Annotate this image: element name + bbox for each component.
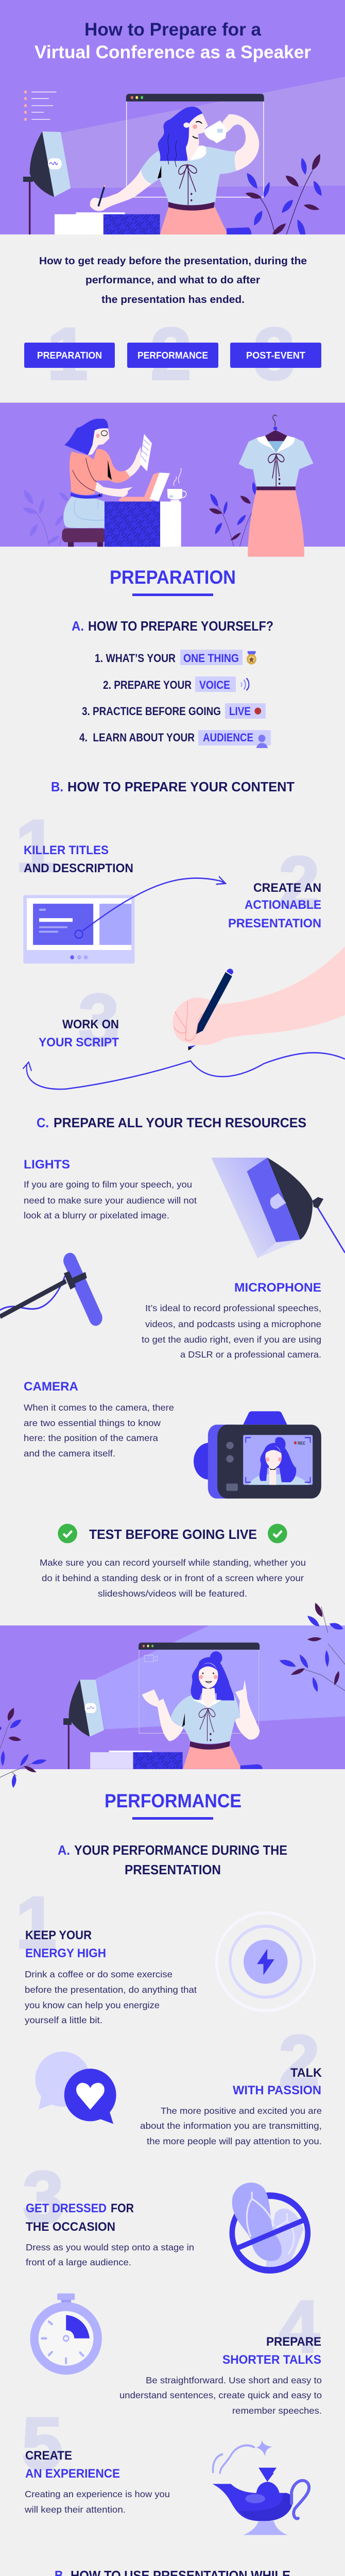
step 5: create an experience: will keep their attention. [24, 2504, 126, 2515]
button: preparation: 1 [47, 313, 88, 395]
step 1: killer titles: KILLER TITLES [24, 843, 109, 857]
step 3: get dressed: 3 [23, 2157, 64, 2239]
button: post-event [230, 313, 321, 395]
list: how to prepare yourself: 4. LEARN ABOUT YOUR [79, 731, 195, 744]
illustration: camera back with rec screen [194, 1411, 321, 1499]
step 2: actionable presentation: ACTIONABLE [245, 898, 321, 912]
step 2: talk with passion: 2 [279, 2021, 320, 2103]
panel: hero header [0, 0, 345, 234]
text block: microphone: to get the audio right, even if you are using [142, 1334, 321, 1345]
step 3: work on your script: 3 [78, 979, 119, 1061]
step 1: killer titles [15, 805, 133, 887]
callout: test before going live: slideshows/videos will be featured. [98, 1588, 247, 1599]
icon: no flip flops [232, 2182, 308, 2270]
text block: microphone [142, 1281, 321, 1360]
text block: camera: are two essential things to know [24, 1418, 161, 1428]
text block: camera: here: the position of the camera [24, 1433, 158, 1443]
heading: preparation [110, 567, 236, 596]
icon: speech bubbles with heart [35, 2052, 116, 2124]
list: how to prepare yourself [79, 650, 271, 748]
step 1: keep your energy high: 1 [15, 1882, 57, 1964]
button: performance: 2 [150, 313, 192, 395]
step 5: create an experience: AN EXPERIENCE [25, 2467, 120, 2481]
subheading A: YOUR PERFORMANCE DURING THE [74, 1842, 287, 1858]
step 2: talk with passion: the more people will pay attention to you. [147, 2136, 322, 2146]
text block: lights: LIGHTS [24, 1158, 70, 1172]
step 2: talk with passion [140, 2021, 322, 2146]
text block: microphone: It’s ideal to record professional speeches, [145, 1303, 321, 1313]
illustration: hand writing with pencil [173, 946, 345, 1050]
panel: performance section [15, 1790, 322, 2576]
step 1: keep your energy high: ENERGY HIGH [25, 1946, 106, 1960]
text block: lights: look at a blurry or pixelated image. [24, 1210, 169, 1221]
list: how to prepare yourself: AUDIENCE [203, 731, 253, 744]
step 5: create an experience: Creating an experience is how you [25, 2489, 170, 2499]
step 3: get dressed: THE OCCASION [26, 2220, 115, 2234]
step 4: prepare shorter talks: 4 [279, 2286, 320, 2368]
step 2: actionable presentation: PRESENTATION [228, 917, 321, 930]
step 1: keep your energy high: KEEP YOUR [25, 1928, 92, 1942]
list: how to prepare yourself: ONE THING [183, 652, 239, 665]
list: how to prepare yourself: VOICE [199, 679, 230, 691]
icon: stopwatch [30, 2294, 102, 2375]
button: preparation: PREPARATION [37, 350, 102, 361]
icon: energy bolt in rings [216, 1913, 315, 2011]
step 4: prepare shorter talks: PREPARE [266, 2335, 321, 2349]
illustration: softbox light [211, 1158, 345, 1258]
label: rec: REC [298, 1441, 305, 1446]
text block: camera: CAMERA [24, 1380, 78, 1394]
step 3: get dressed: GET DRESSED [26, 2201, 107, 2215]
step 3: get dressed: front of a large audience. [26, 2257, 131, 2267]
intro text [39, 256, 307, 306]
step 4: prepare shorter talks: remember speeches. [232, 2405, 322, 2416]
subheading B: HOW TO PREPARE YOUR CONTENT [67, 779, 295, 794]
text block: lights [24, 1158, 197, 1221]
button: performance: PERFORMANCE [137, 350, 208, 361]
illustration: boom microphone [0, 1261, 96, 1318]
step 3: work on your script [39, 979, 119, 1061]
arrow: writing line back to step 3 [23, 1053, 345, 1089]
icons: medal, sound, live dot, person [241, 651, 268, 748]
step 4: prepare shorter talks: understand sentences, create quick and easy to [119, 2390, 322, 2400]
step 4: prepare shorter talks: Be straightforward. Use short and easy to [146, 2375, 322, 2385]
button: post-event: 3 [254, 313, 295, 395]
subheading A: A. [58, 1842, 70, 1858]
callout: test before going live: do it behind a standing desk or in front of a screen where your [42, 1573, 304, 1583]
step 1: keep your energy high: Drink a coffee or do some exercise [25, 1969, 173, 1979]
text block: camera: and the camera itself. [24, 1448, 115, 1459]
button: performance [127, 313, 218, 395]
icon: slide deck [23, 895, 135, 963]
step 5: create an experience: CREATE [25, 2449, 72, 2463]
step 2: talk with passion: about the information you are transmitting, [140, 2121, 322, 2131]
step 2: actionable presentation: 2 [279, 842, 320, 924]
step 3: get dressed [23, 2157, 194, 2267]
heading: performance [105, 1790, 242, 1820]
step 3: work on your script: YOUR SCRIPT [39, 1036, 119, 1049]
text block: microphone: videos, and podcasts using a microphone [145, 1319, 321, 1329]
step 5: create an experience: 5 [22, 2403, 63, 2485]
button: preparation [24, 313, 115, 395]
illustration: woman at desk and dress on hanger [23, 415, 313, 557]
button: post-event: POST-EVENT [246, 350, 305, 361]
step 1: killer titles: AND DESCRIPTION [24, 861, 133, 875]
step 1: keep your energy high: yourself a little bit. [25, 2015, 102, 2025]
step 2: actionable presentation [228, 842, 321, 930]
step 4: prepare shorter talks: SHORTER TALKS [222, 2353, 321, 2367]
title: Virtual Conference as a Speaker [34, 42, 311, 62]
intro text: performance, and what to do after [85, 275, 260, 286]
subheading A [58, 1842, 287, 1877]
hero illustration: woman drinking tea on a video call [23, 77, 345, 234]
illustration: woman presenting on a video call [0, 1603, 345, 1788]
text block: camera: When it comes to the camera, there [24, 1402, 174, 1413]
subheading C: C. [37, 1115, 49, 1130]
list: how to prepare yourself: LIVE [229, 705, 251, 718]
icon: green check right [268, 1524, 287, 1543]
title: How to Prepare for a [84, 20, 262, 40]
panel: preparation banner illustration [0, 402, 345, 557]
step 1: keep your energy high: you know can help you energize [25, 2000, 160, 2010]
intro text: the presentation has ended. [101, 294, 245, 306]
panel: preparation section [0, 567, 345, 1599]
step 1: killer titles: 1 [15, 805, 57, 887]
intro text: How to get ready before the presentation, during the [39, 256, 307, 267]
step 2: actionable presentation: CREATE AN [253, 881, 321, 895]
heading: preparation: PREPARATION [110, 567, 236, 588]
panel: introduction and navigation [24, 256, 321, 395]
step 1: keep your energy high: before the presentation, do anything that [25, 1985, 197, 1995]
callout: test before going live [40, 1524, 306, 1599]
subheading A: PRESENTATION [125, 1862, 221, 1877]
icon: green check left [58, 1524, 77, 1543]
step 3: work on your script: WORK ON [62, 1018, 119, 1031]
step 1: keep your energy high [15, 1882, 197, 2025]
text block: lights: need to make sure your audience will not [24, 1195, 197, 1206]
callout: test before going live: Make sure you can record yourself while standing, whether you [40, 1557, 306, 1568]
text block: lights: If you are going to film your speech, you [24, 1179, 192, 1190]
text block: microphone: MICROPHONE [234, 1281, 321, 1295]
list: how to prepare yourself: 2. PREPARE YOUR [103, 679, 192, 691]
callout: test before going live: TEST BEFORE GOING LIVE [89, 1527, 257, 1542]
heading: performance: PERFORMANCE [105, 1790, 242, 1811]
step 2: talk with passion: The more positive and excited you are [161, 2106, 322, 2116]
subheading A: HOW TO PREPARE YOURSELF? [88, 618, 273, 634]
icon: magic lamp [212, 2440, 309, 2535]
text block: camera [24, 1380, 174, 1459]
list: how to prepare yourself: 1. WHAT’S YOUR [95, 652, 176, 665]
step 3: get dressed: FOR [111, 2201, 134, 2215]
title [34, 20, 311, 62]
subheading A: A. [72, 618, 84, 634]
text block: microphone: a DSLR or a professional camera. [180, 1349, 321, 1360]
panel: performance banner illustration [0, 1603, 345, 1788]
subheading C: PREPARE ALL YOUR TECH RESOURCES [54, 1115, 306, 1130]
list: how to prepare yourself: 3. PRACTICE BEFORE GOING [82, 705, 221, 718]
step 4: prepare shorter talks [119, 2286, 322, 2416]
arrow: to step 2 [75, 876, 226, 938]
step 2: talk with passion: TALK [290, 2066, 322, 2080]
subheading B: B. [51, 779, 63, 794]
step 3: get dressed: Dress as you would step onto a stage in [26, 2242, 194, 2252]
step 5: create an experience [22, 2403, 170, 2515]
step 2: talk with passion: WITH PASSION [233, 2083, 321, 2097]
